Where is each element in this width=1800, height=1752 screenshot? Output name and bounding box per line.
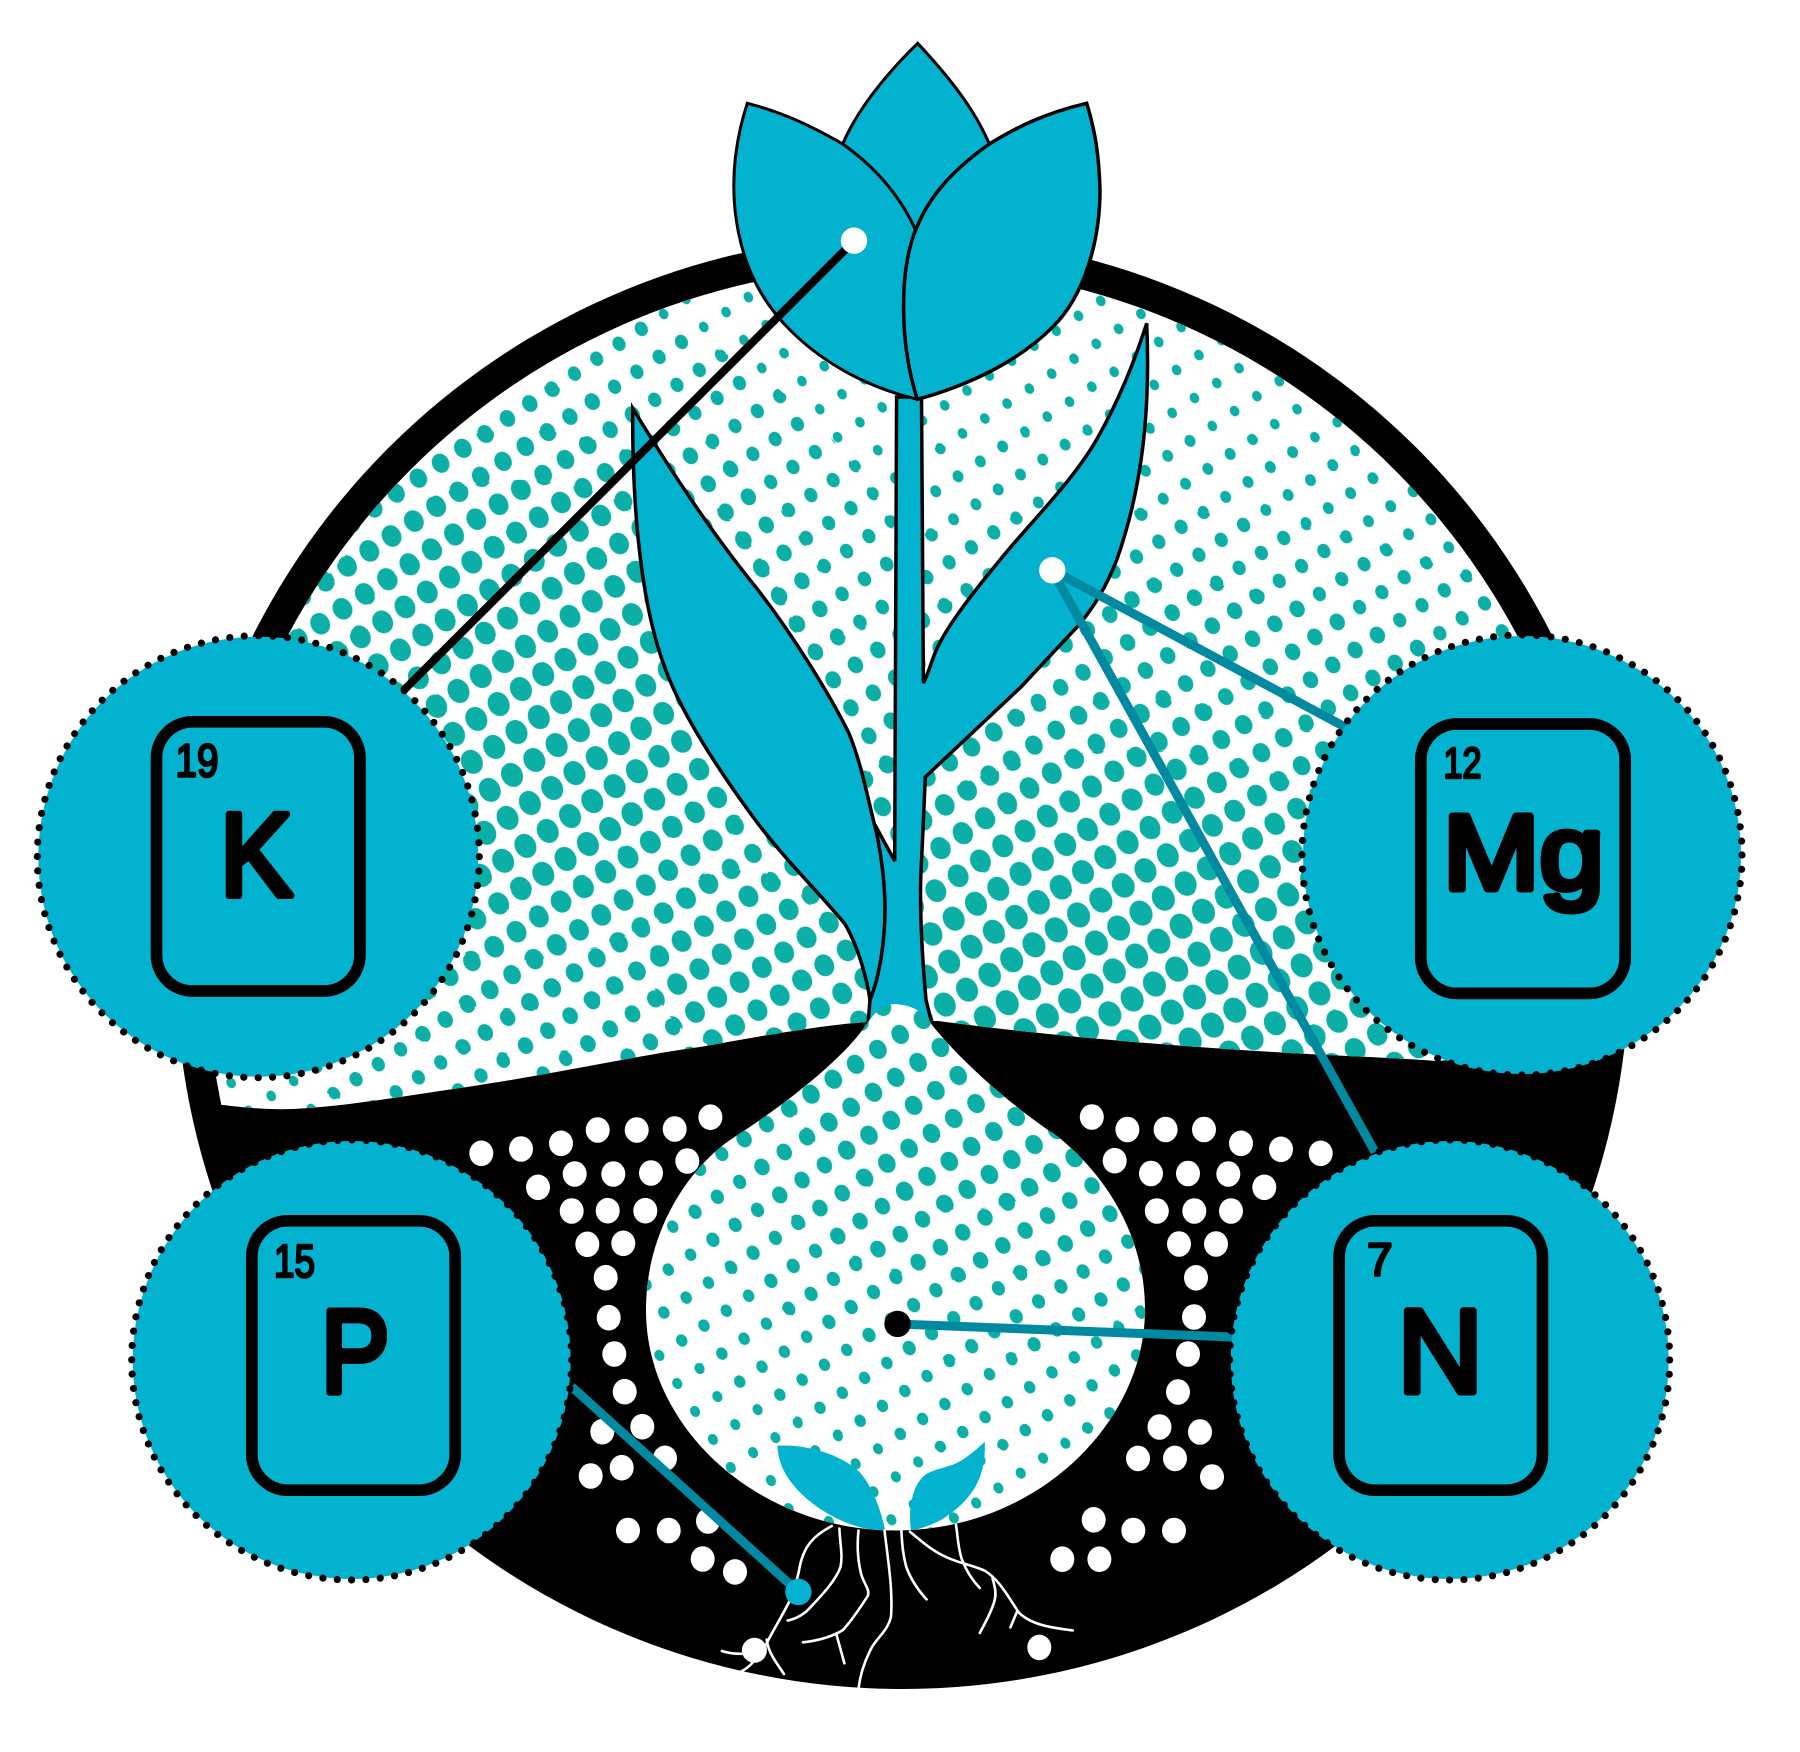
badge: magnesium Mg: 12 (1444, 739, 1482, 788)
connector: potassium to flower (403, 228, 867, 691)
plant stem and right leaf (868, 323, 1148, 1024)
connector: phosphorus to root (572, 1387, 812, 1605)
badge: potassium K: 19 (176, 734, 218, 786)
badge: phosphorus P (132, 1140, 572, 1580)
badge: phosphorus P: 15 (274, 1235, 315, 1287)
badge: potassium K (37, 636, 479, 1078)
white dot at root tip (742, 1638, 767, 1663)
black soil disc and ring (176, 235, 1630, 1689)
plant left leaf (633, 408, 885, 1000)
bulb sprout: right leaf (910, 1442, 985, 1530)
flower: right petal (904, 103, 1100, 399)
connector: magnesium and nitrogen to leaf (1039, 557, 1375, 1152)
badge: nitrogen N: N (1398, 1286, 1483, 1418)
flower: left petal (734, 103, 917, 399)
connector: nitrogen to bulb (884, 1311, 1232, 1337)
badge: magnesium Mg: Mg (1443, 794, 1604, 912)
badge: potassium K: K (220, 790, 292, 922)
bulb with halftone dots (646, 1004, 1145, 1530)
badge: nitrogen N: 7 (1367, 1234, 1393, 1286)
roots (722, 1525, 1073, 1689)
badge: nitrogen N (1230, 1140, 1670, 1580)
white soil nutrient dots (469, 1104, 1333, 1660)
badge: magnesium Mg (1302, 635, 1742, 1075)
sky with halftone dots (216, 282, 1518, 1110)
flower: centre petal (843, 43, 989, 240)
bulb sprout: left leaf (777, 1445, 885, 1531)
badge: phosphorus P: P (321, 1286, 390, 1418)
